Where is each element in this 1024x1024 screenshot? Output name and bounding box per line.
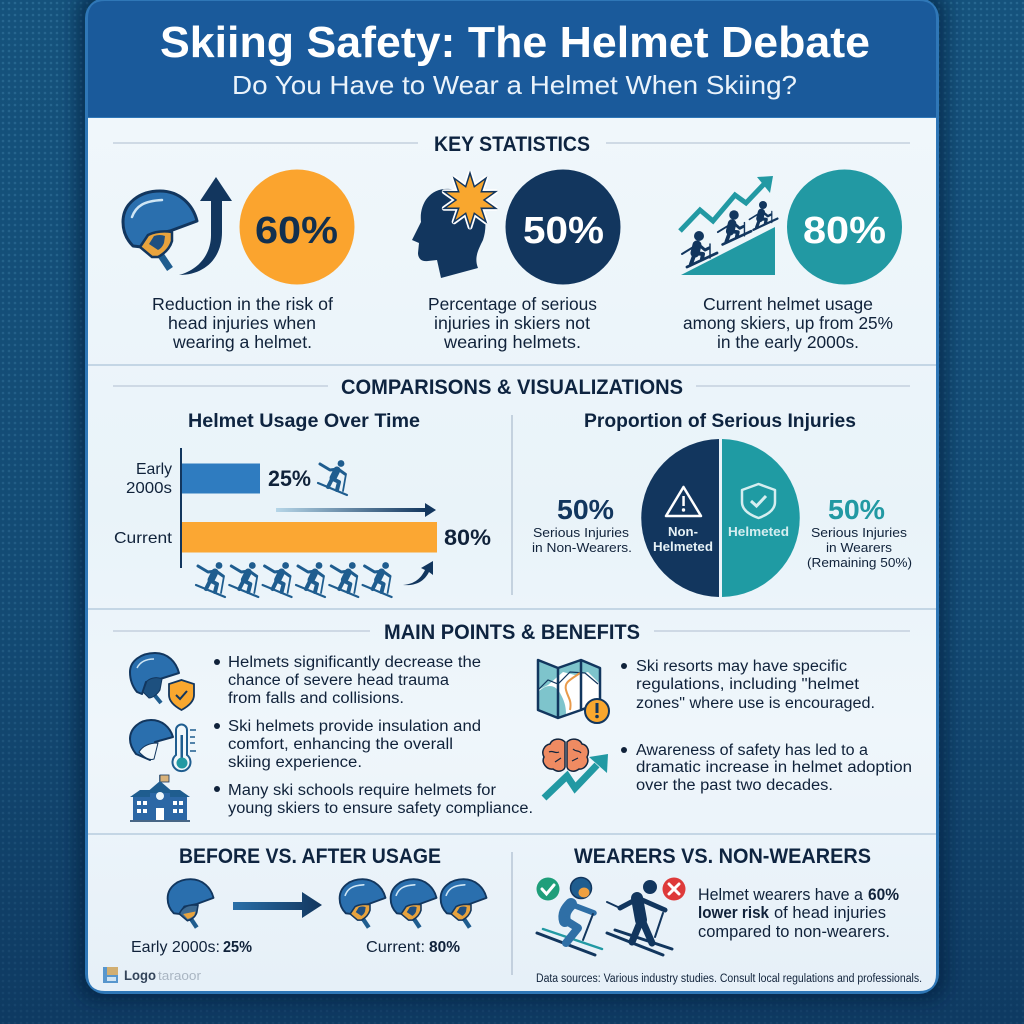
icon: cross badge	[662, 878, 686, 900]
heading: helmet usage over time: Helmet Usage Over Time	[188, 410, 420, 432]
text: ski resort regulations	[621, 658, 875, 712]
text: wearers comparison: compared to non-wearers.	[698, 923, 890, 941]
text: 50 percent description	[428, 294, 597, 352]
icon: helmet with up arrow	[123, 177, 232, 275]
text: 60 percent description: Reduction in the risk of	[152, 294, 333, 314]
callout: 50 percent non-wearers: Serious Injuries	[533, 525, 630, 540]
text: 80 percent description: Current helmet usage	[703, 294, 873, 314]
stat: 80 percent: 80%	[803, 210, 886, 252]
text: 50 percent description: injuries in skiers not	[434, 313, 590, 333]
text: insulation and comfort: skiing experience.	[228, 754, 362, 771]
label: early 2000s 25 percent: 25%	[223, 939, 252, 956]
icon: trail map with alert	[538, 660, 609, 723]
callout: 50 percent wearers: in Wearers	[826, 540, 893, 555]
arrow: before to after	[233, 892, 322, 918]
text: awareness of safety	[621, 742, 912, 794]
text: awareness of safety: dramatic increase in helmet adoption	[636, 759, 912, 776]
stat: 50 percent: 50%	[523, 210, 604, 252]
callout: 50 percent wearers: Serious Injuries	[811, 525, 908, 540]
text: ski resort regulations: zones" where use is encouraged.	[636, 695, 875, 712]
logo: taraoor	[158, 968, 202, 983]
callout: 50 percent wearers	[807, 494, 912, 570]
icon: skiers climbing slope with rising arrow	[680, 176, 777, 275]
panel: key statistics	[123, 133, 902, 352]
callout: 50 percent non-wearers: in Non-Wearers.	[532, 540, 632, 555]
text: severe head trauma: from falls and collisions.	[228, 690, 404, 707]
icon: helmet with thermometer	[130, 720, 196, 771]
text: ski resort regulations: regulations, including "helmet	[636, 676, 860, 693]
stat: 80 percent	[787, 170, 902, 284]
text: wearers comparison	[698, 886, 899, 941]
subtitle: Do You Have to Wear a Helmet When Skiing?	[232, 70, 797, 100]
text: 60 percent description	[152, 294, 333, 352]
body panel	[88, 118, 936, 991]
text: 50 percent description: Percentage of serious	[428, 294, 597, 314]
callout: 50 percent non-wearers	[532, 494, 632, 555]
text: 60 percent description: head injuries when	[168, 313, 316, 333]
callout: 50 percent wearers: (Remaining 50%)	[807, 555, 912, 570]
panel: before vs after usage	[131, 845, 486, 956]
text: ski schools: young skiers to ensure safety compliance.	[228, 800, 533, 817]
logo: Logo	[124, 967, 156, 983]
heading: key statistics: KEY STATISTICS	[434, 133, 590, 156]
label: current 80 percent	[366, 939, 460, 956]
heading: comparisons: COMPARISONS & VISUALIZATIONS	[341, 376, 683, 399]
stat: 60 percent	[240, 170, 354, 284]
bar chart: helmet usage: Current	[114, 530, 173, 547]
heading: before vs after: BEFORE VS. AFTER USAGE	[179, 845, 441, 868]
heading: wearers vs non-wearers: WEARERS VS. NON-WEARERS	[574, 845, 871, 868]
bar chart: helmet usage: 25%	[268, 466, 311, 491]
pie chart: proportion of serious injuries: Non-	[668, 524, 698, 539]
label: current 80 percent: 80%	[429, 939, 460, 956]
text: wearers comparison: Helmet wearers have a	[698, 886, 864, 904]
header band	[88, 1, 936, 117]
text: 80 percent description: among skiers, up from 25%	[683, 313, 893, 333]
text: wearers comparison: of head injuries	[774, 904, 886, 922]
icon: brain with rising arrow	[543, 739, 608, 798]
panel: main points and benefits	[130, 621, 912, 821]
panel: comparisons and visualizations	[114, 376, 912, 597]
text: ski resort regulations: Ski resorts may have specific	[636, 658, 847, 675]
text: wearers comparison: lower risk	[698, 904, 770, 922]
icon: head with impact star	[412, 173, 496, 278]
text: wearers comparison: 60%	[868, 886, 899, 904]
text: severe head trauma	[214, 654, 481, 707]
bar chart: helmet usage: Early	[136, 461, 172, 478]
text: 80 percent description	[683, 294, 893, 352]
pie chart: proportion of serious injuries	[641, 439, 800, 597]
text: 60 percent description: wearing a helmet.	[172, 332, 312, 352]
label: early 2000s 25 percent: Early 2000s:	[131, 939, 220, 956]
text: severe head trauma: Helmets significantly decrease the	[228, 654, 481, 671]
icon: warning triangle	[666, 487, 701, 516]
panel: wearers vs non-wearers	[536, 845, 899, 955]
icon: unhelmeted skier	[607, 880, 672, 955]
bar chart: helmet usage: 2000s	[126, 480, 172, 497]
icon: helmet with shield	[130, 653, 194, 710]
text: ski schools	[214, 782, 533, 817]
title: Skiing Safety: The Helmet Debate	[160, 18, 870, 67]
icon: plain helmet early 2000s	[168, 879, 214, 928]
text: ski schools: Many ski schools require helmets for	[228, 782, 496, 799]
text: awareness of safety: over the past two decades.	[636, 777, 833, 794]
text: awareness of safety: Awareness of safety has led to a	[636, 742, 868, 759]
text: insulation and comfort: comfort, enhancing the overall	[228, 736, 453, 753]
bar chart: helmet usage: 80%	[444, 525, 491, 550]
stat: 60 percent: 60%	[255, 210, 338, 252]
heading: main points: MAIN POINTS & BENEFITS	[384, 621, 640, 644]
heading: proportion of serious injuries: Proportion of Serious Injuries	[584, 410, 856, 432]
callout: 50 percent wearers: 50%	[828, 494, 885, 525]
label: current 80 percent: Current:	[366, 939, 425, 956]
pie chart: proportion of serious injuries: Helmeted	[653, 539, 713, 554]
logo	[103, 967, 202, 983]
pie chart: proportion of serious injuries: Helmeted	[728, 524, 789, 539]
text: insulation and comfort: Ski helmets provide insulation and	[228, 718, 481, 735]
stat: 50 percent	[506, 170, 620, 284]
icon: shield with check	[742, 484, 775, 518]
text: insulation and comfort	[214, 718, 481, 771]
icon: helmeted skier	[537, 878, 602, 955]
text: 50 percent description: wearing helmets.	[443, 332, 581, 352]
icons: three helmets current	[340, 879, 486, 928]
icon: school building	[130, 775, 190, 821]
bar chart: helmet usage	[114, 448, 491, 597]
callout: 50 percent non-wearers: 50%	[557, 494, 614, 525]
text: 80 percent description: in the early 2000s.	[717, 332, 859, 352]
footnote: data sources: Data sources: Various industry studies. Consult local regulations and professionals.	[536, 973, 922, 985]
text: severe head trauma: chance of severe head trauma	[228, 672, 449, 689]
icon: check badge	[536, 878, 560, 900]
